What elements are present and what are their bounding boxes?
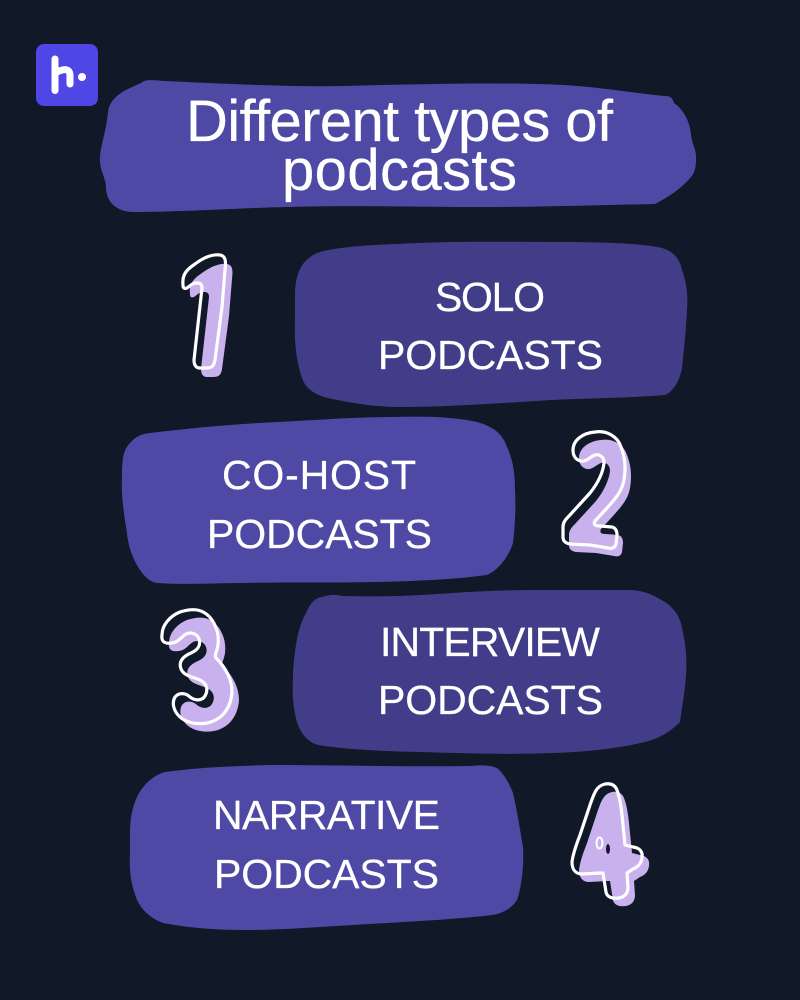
- panel: solo podcasts: PODCASTS: [378, 332, 603, 378]
- number 1: [183, 255, 232, 377]
- title: podcasts: [282, 138, 517, 203]
- panel: interview podcasts: INTERVIEW: [380, 619, 600, 665]
- panel: solo podcasts: [295, 242, 687, 407]
- panel: interview podcasts: [293, 590, 686, 754]
- panel: co-host podcasts: [122, 417, 515, 584]
- panel: co-host podcasts: CO-HOST: [222, 452, 416, 498]
- title: [100, 80, 696, 212]
- panel: co-host podcasts: PODCASTS: [207, 511, 432, 557]
- icon: brand logo: [36, 44, 98, 106]
- panel: interview podcasts: PODCASTS: [378, 677, 603, 723]
- title: Different types of: [186, 89, 614, 154]
- panel: solo podcasts: SOLO: [435, 274, 545, 320]
- panel: narrative podcasts: [130, 765, 523, 930]
- panel: narrative podcasts: NARRATIVE: [213, 792, 440, 838]
- panel: narrative podcasts: PODCASTS: [214, 851, 439, 897]
- number 4: [572, 784, 649, 906]
- number 3: [162, 610, 239, 732]
- number 2: [563, 432, 631, 556]
